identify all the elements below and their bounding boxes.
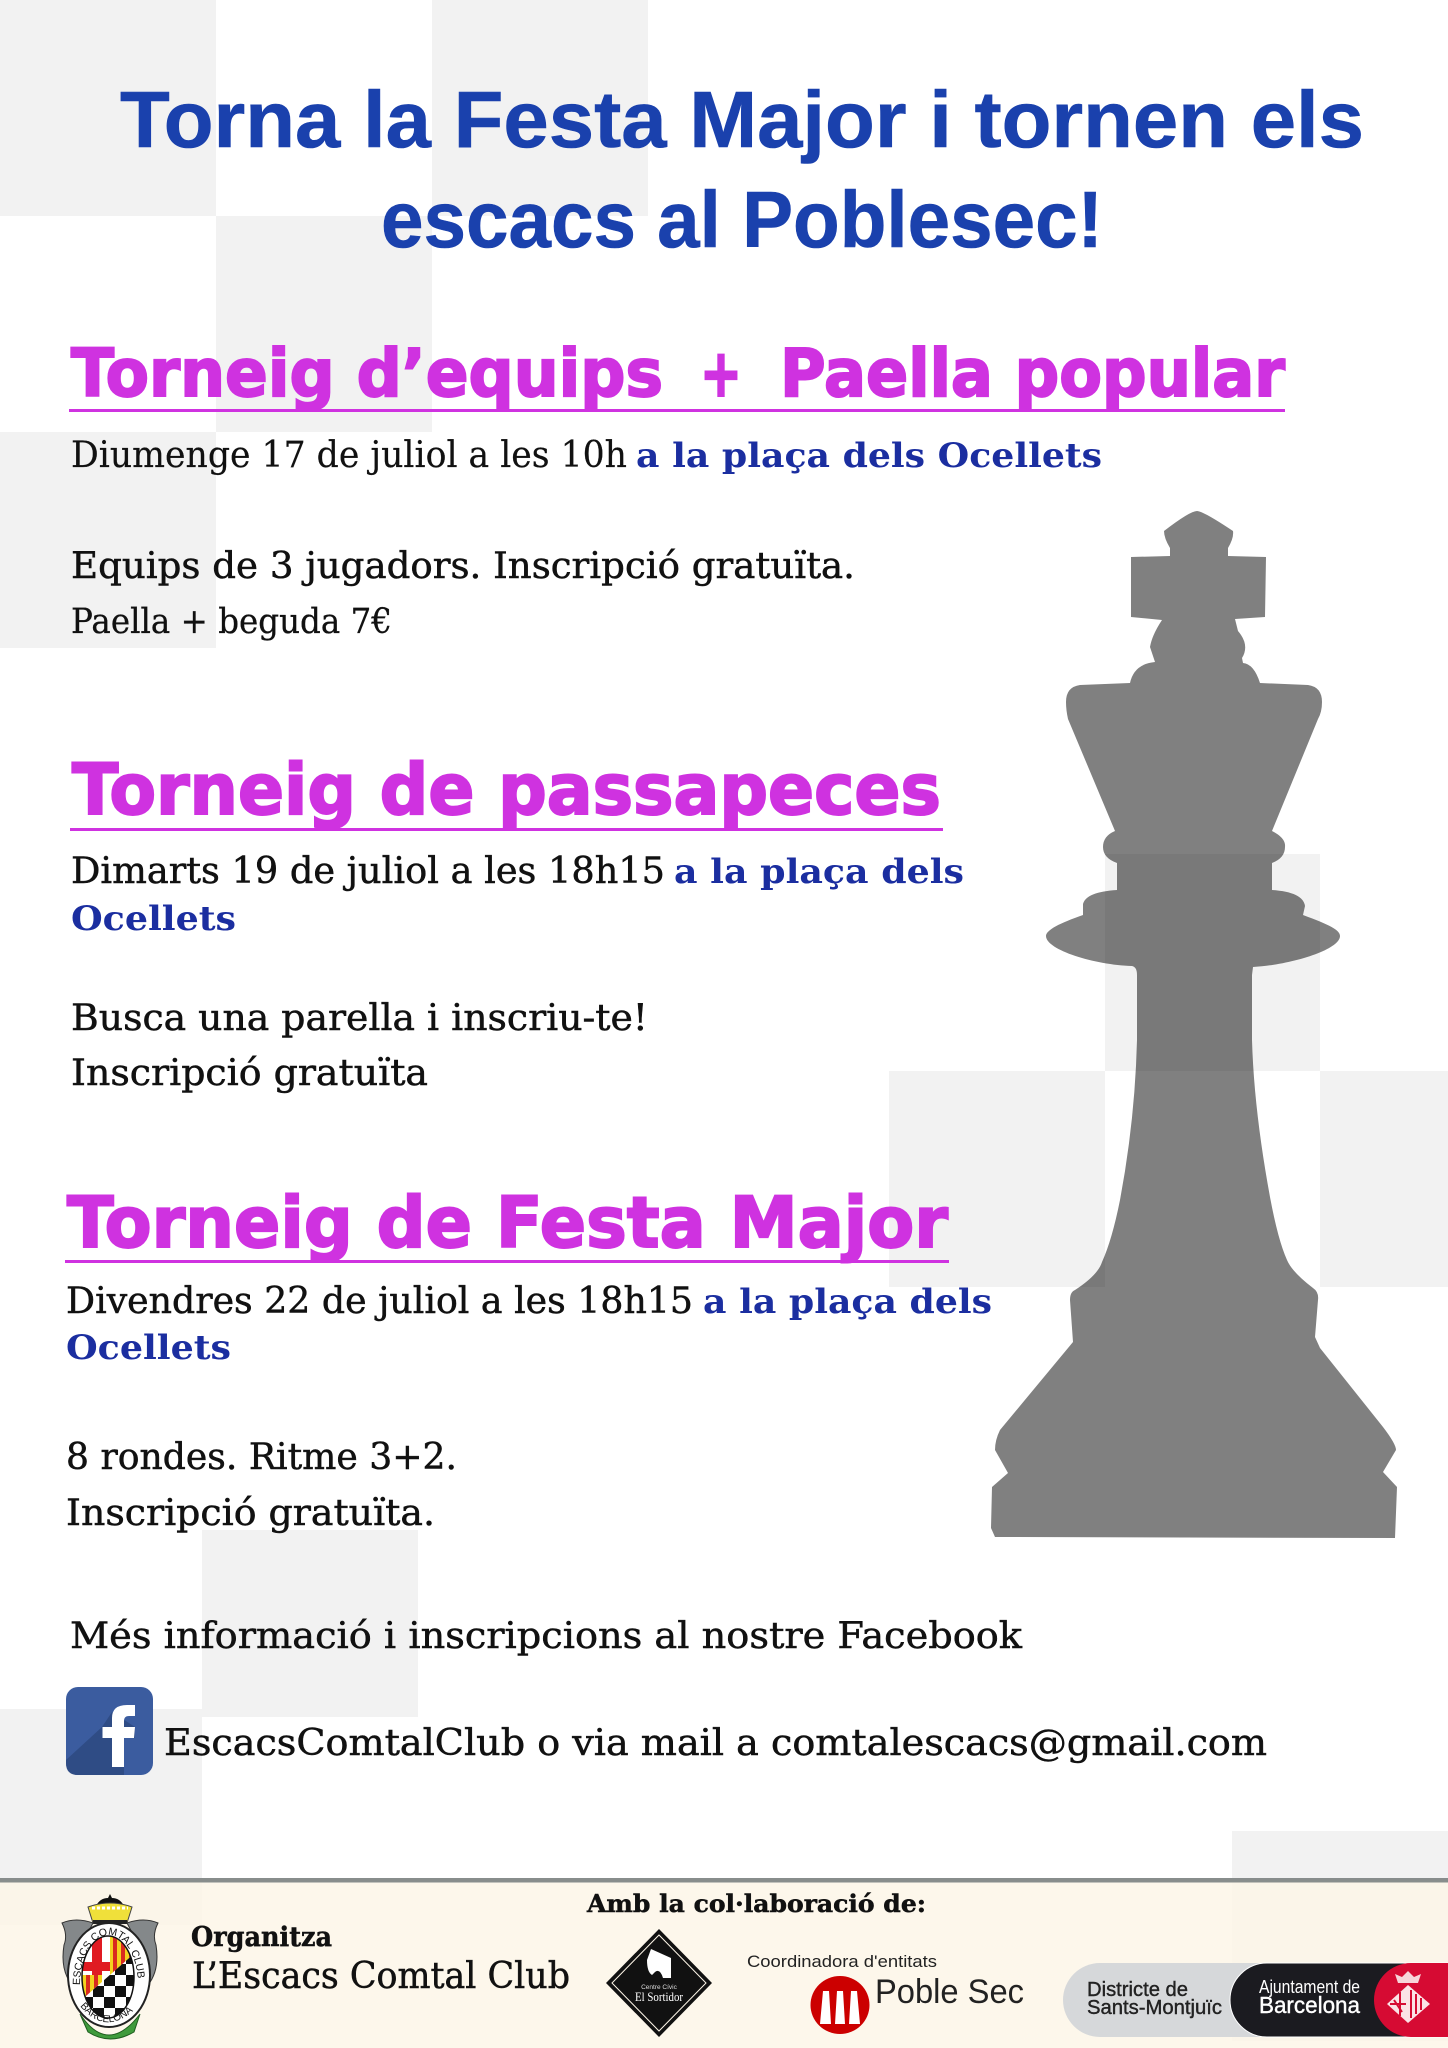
panel: passapeces tournament: [70, 749, 964, 1094]
crest: laurel: [80, 2014, 140, 2039]
text: date and place: [66, 1281, 992, 1368]
logo: El Sortidor: [606, 1929, 712, 2037]
heading: team tournament: [69, 335, 1285, 412]
text: date and place: a la plaça dels Ocellets: [636, 436, 1102, 476]
heading: team tournament: Paella popular: [780, 335, 1285, 412]
logo: Coordinadora Poble Sec: Poble Sec: [875, 1973, 1024, 2011]
text: organiser: [191, 1922, 570, 1997]
crest: dolphins: [62, 1920, 158, 1985]
text: collaborators heading: Amb la col·laboració de:: [586, 1889, 926, 1918]
logo: El Sortidor: El Sortidor: [635, 1990, 684, 2004]
heading: festa major: Torneig de Festa Major: [67, 1182, 948, 1264]
title: escacs al Poblesec!: [381, 175, 1103, 264]
logo: Ajuntament de Barcelona: [1063, 1963, 1448, 2037]
logo: Coordinadora Poble Sec: [747, 1952, 1024, 2034]
pill: district: Districte de: [1087, 1979, 1188, 2001]
text: date and place: [71, 435, 1102, 476]
heading: team tournament: Torneig d’equips: [71, 335, 663, 412]
pill: ajuntament: [1230, 1963, 1448, 2037]
crest: black eagle and crown: [88, 1894, 132, 1924]
panel: team tournament: [69, 335, 1285, 642]
pill: ajuntament: Barcelona: [1259, 1992, 1360, 2018]
text: round details: Inscripció gratuïta.: [66, 1493, 435, 1534]
text: team details: Equips de 3 jugadors. Inscripció gratuïta.: [71, 546, 855, 587]
text: round details: [66, 1437, 457, 1534]
text: pair details: Inscripció gratuïta: [71, 1053, 428, 1094]
logo: club crest: [61, 1894, 159, 2040]
text: date and place: Diumenge 17 de juliol a les 10h: [71, 435, 627, 476]
crest: ring: [68, 1923, 150, 2027]
icon: chess king silhouette: [991, 511, 1397, 1538]
panel: festa major tournament: [65, 1182, 992, 1534]
text: date and place: Divendres 22 de juliol a les 18h15: [66, 1281, 693, 1322]
heading: team tournament: +: [700, 335, 742, 412]
crest: ring lettering: [72, 1928, 145, 2022]
footer band: [0, 1878, 1448, 2048]
pill: district: [1063, 1963, 1290, 2037]
text: organiser: L’Escacs Comtal Club: [192, 1956, 570, 1997]
text: round details: 8 rondes. Ritme 3+2.: [66, 1437, 457, 1478]
text: date and place: a la plaça dels: [703, 1282, 992, 1322]
text: date and place: Ocellets: [66, 1328, 231, 1368]
text: date and place: Ocellets: [71, 899, 236, 939]
title: Torna la Festa Major i tornen els: [120, 75, 1364, 164]
text: date and place: [71, 851, 964, 939]
heading: passapeces: Torneig de passapeces: [72, 749, 941, 831]
pill: ajuntament: Ajuntament de: [1259, 1977, 1360, 1997]
text: team details: [71, 546, 855, 642]
text: date and place: a la plaça dels: [674, 852, 964, 892]
logo: Coordinadora Poble Sec: Coordinadora d'entitats: [747, 1952, 937, 1971]
logo: El Sortidor: Centre Cívic: [641, 1984, 678, 1991]
text: pair details: [71, 998, 648, 1094]
icon: facebook: [66, 1687, 153, 1775]
text: contact: EscacsComtalClub o via mail a comtalescacs@gmail.com: [164, 1723, 1267, 1764]
crest: ring lettering: ESCACS COMTAL CLUB: [72, 1928, 145, 1984]
text: pair details: Busca una parella i inscriu-te!: [71, 998, 648, 1039]
text: date and place: Dimarts 19 de juliol a les 18h15: [71, 851, 665, 892]
text: team details: Paella + beguda 7€: [71, 602, 392, 642]
crest: shield: [78, 1935, 137, 2020]
title: [120, 75, 1364, 264]
crest: ring lettering: BARCELONA: [80, 2002, 134, 2022]
text: more information: Més informació i inscripcions al nostre Facebook: [70, 1616, 1023, 1657]
pill: red emblem: [1374, 1963, 1448, 2037]
pill: district: Sants-Montjuïc: [1087, 1997, 1222, 2019]
text: organiser: Organitza: [191, 1922, 332, 1953]
